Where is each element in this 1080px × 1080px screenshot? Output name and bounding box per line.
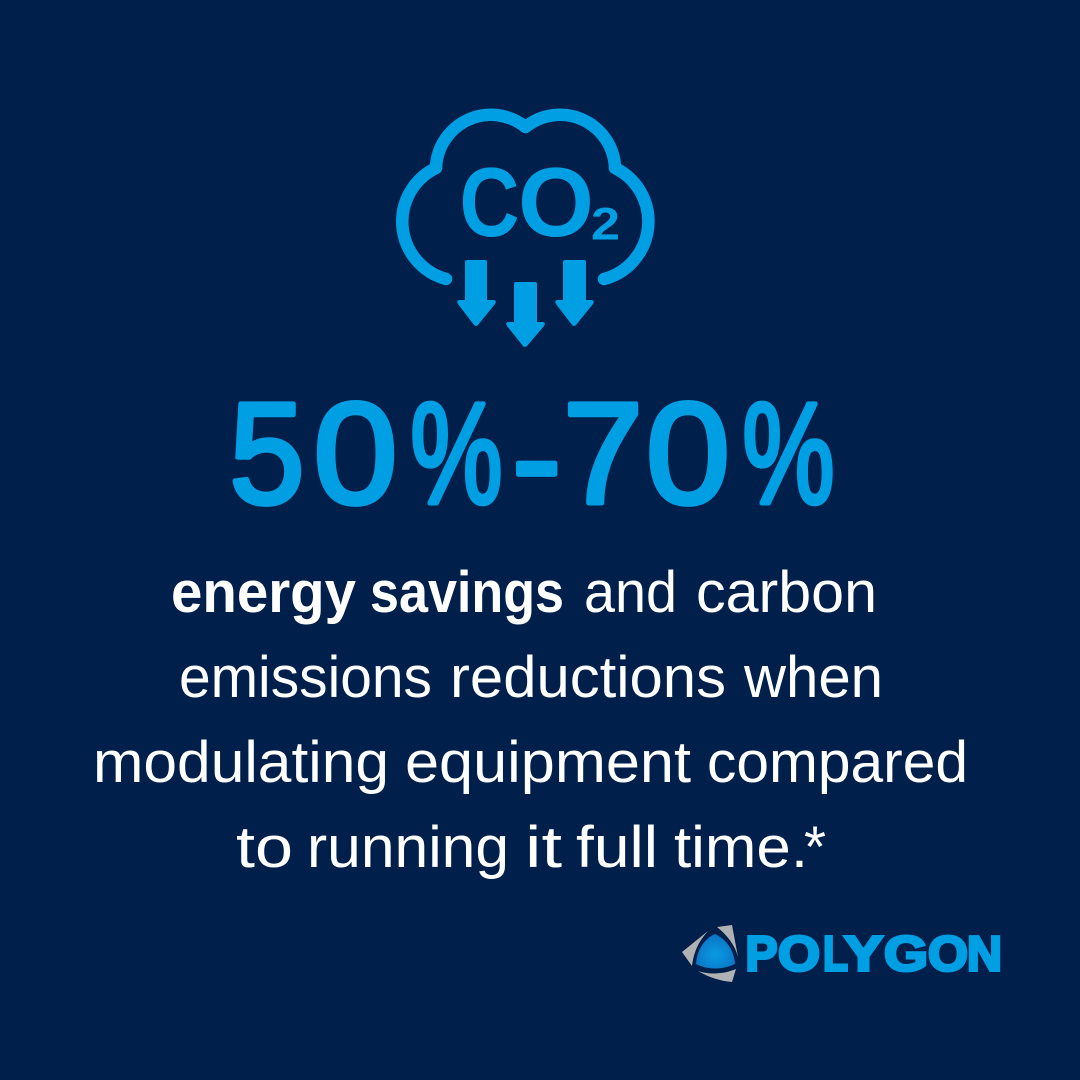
line 1: savings [370,560,564,625]
line 1: carbon [696,560,877,625]
cloud outline [402,115,648,279]
headline statistic: % [742,373,835,534]
headline statistic: 0 [646,373,730,534]
line 4: time. [674,815,808,880]
logo wordmark: Y [844,927,883,981]
line 4: running [307,815,509,880]
line 4 [236,815,826,880]
line 4: it [525,815,562,880]
line 4: to [236,815,293,880]
line 3 [93,730,968,795]
line 3: equipment [405,730,691,795]
body text [93,560,968,880]
line 2: emissions [179,645,432,710]
headline statistic: - [512,377,561,538]
logo wordmark: P [746,927,778,981]
icon: CO2 cloud with down arrows [402,115,648,347]
logo wordmark: O [778,927,820,981]
logo: Polygon [682,925,1002,982]
logo wordmark: O [928,927,968,981]
logo wordmark: N [967,927,1002,981]
headline statistic [230,373,835,538]
arrow left [457,260,496,326]
CO2 label: C [460,147,520,257]
line 2: when [743,645,883,710]
line 2 [179,645,883,710]
headline statistic: 5 [230,373,304,534]
line 1: and [584,560,677,625]
line 2: reductions [450,645,726,710]
logo emblem [682,925,738,982]
logo wordmark [746,927,1002,981]
headline statistic: % [410,373,503,534]
logo wordmark: L [823,927,848,981]
CO2 label: 2 [591,198,620,250]
line 4: full [576,815,658,880]
line 3: modulating [93,730,389,795]
CO2 label: O [518,147,594,257]
arrow right [555,260,594,326]
headline statistic: 7 [563,373,643,534]
logo wordmark: G [884,927,928,981]
line 1: energy [171,560,356,625]
arrow centre [506,282,545,347]
headline statistic: 0 [314,373,398,534]
CO2 label [460,147,620,257]
line 3: compared [707,730,968,795]
line 1 [171,560,877,625]
line 4: * [804,815,826,880]
